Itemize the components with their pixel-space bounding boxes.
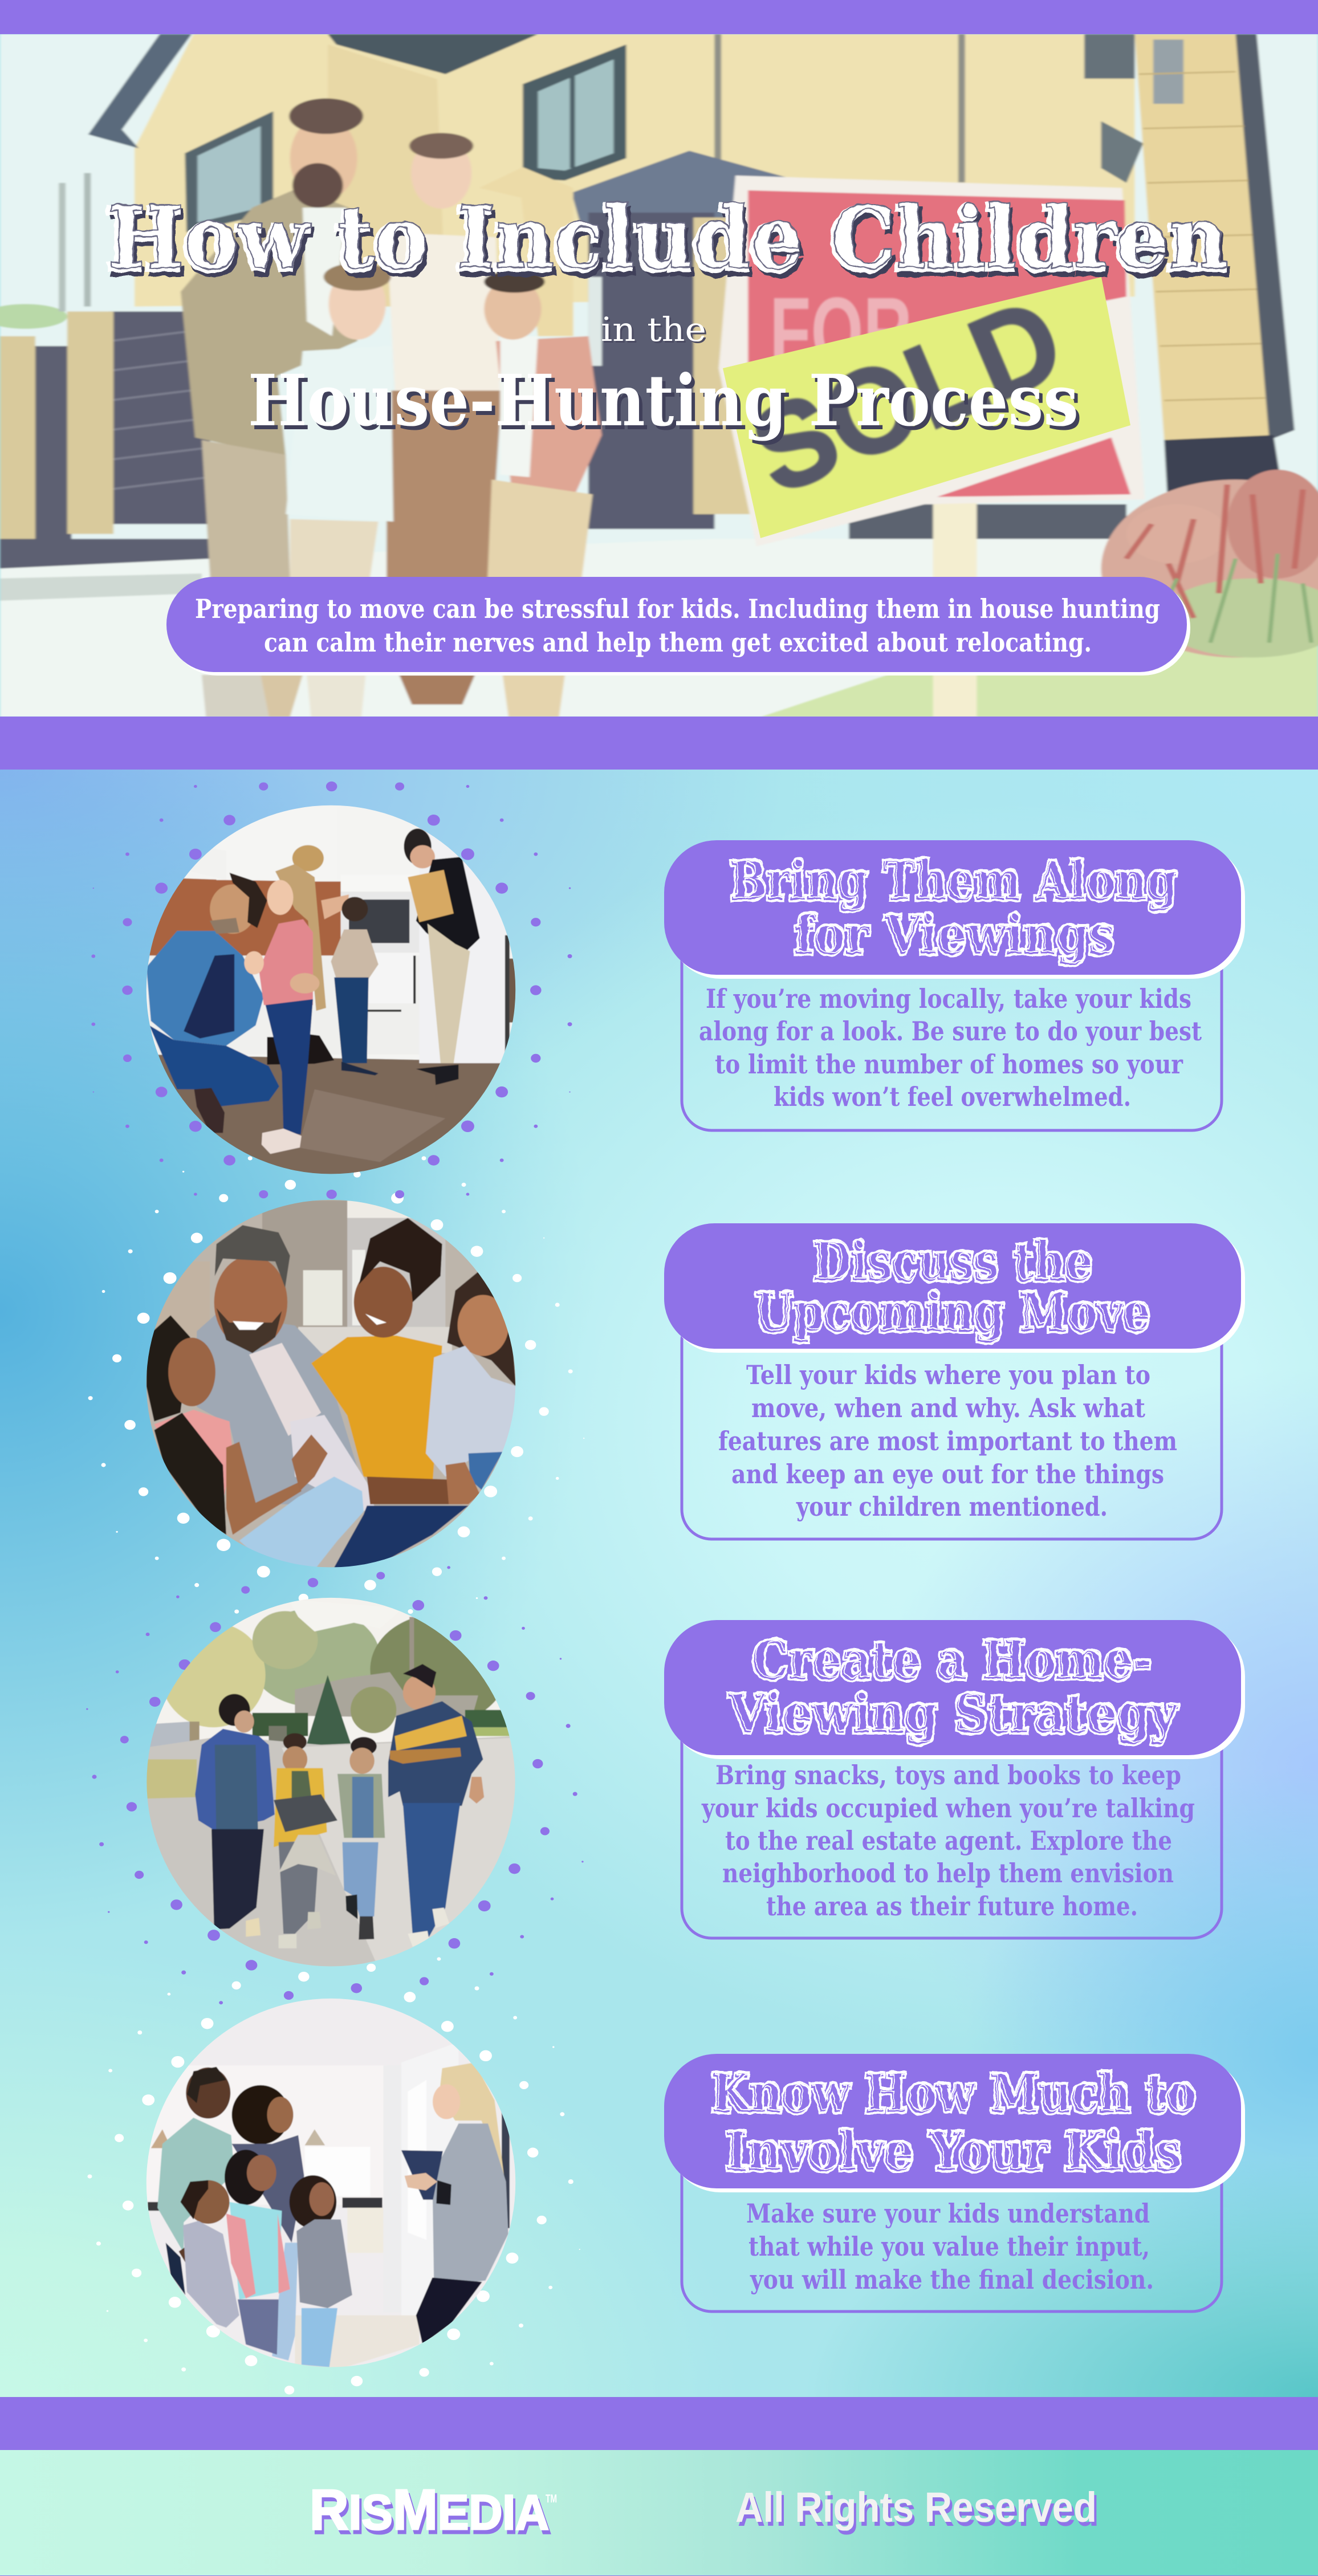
logo: RISMedia: RISMEDIA [310,2478,549,2542]
boy 2 [351,1737,377,1756]
heading pill: for Viewings [794,905,1114,966]
body box [682,1710,1222,1938]
car behind sign [849,504,1126,544]
body text: Make sure your kids understand [746,2198,1150,2229]
woman [232,2085,290,2144]
body text: features are most important to them [718,1426,1177,1456]
heading pill: Bring Them Along [731,848,1178,910]
heading pill [664,1223,1245,1353]
title line 1: How to Include Children [105,190,1226,290]
sold lettering: SOLD [734,271,1080,519]
top purple band [0,0,1318,34]
body text [746,2198,1154,2295]
heading pill [664,1620,1245,1759]
body text: and keep an eye out for the things [731,1459,1164,1490]
left fence [109,311,210,524]
dots ring: white, photo 2 [88,1156,584,1614]
intro callout pill [166,577,1190,675]
body text: Tell your kids where you plan to [746,1360,1150,1390]
logo: RISMedia: RISMEDIA [312,2482,551,2546]
footer band [0,2450,1318,2575]
body text: your kids occupied when you’re talking [701,1793,1195,1824]
woman behind [292,845,324,871]
girl [286,346,393,522]
man [403,1675,436,1710]
body text: move, when and why. Ask what [751,1393,1146,1423]
body text: along for a look. Be sure to do your best [699,1016,1202,1047]
man [197,1314,369,1504]
heading pill: Bring Them Along [730,850,1177,912]
heading pill [664,2054,1245,2192]
body text: to the real estate agent. Explore the [725,1825,1172,1856]
body text: the area as their future home. [766,1891,1138,1922]
panel: discuss the upcoming move [664,1223,1245,1539]
intro callout pill: Preparing to move can be stressful for kids. Including them in house hunting [195,593,1160,624]
heading pill: Create a Home- [752,1630,1152,1691]
heading pill: Viewing Strategy [728,1683,1178,1745]
agent [404,829,432,865]
body text: If you’re moving locally, take your kids [706,983,1191,1014]
bush [1101,479,1318,658]
heading pill: Know How Much to [711,2063,1195,2125]
body text: kids won’t feel overwhelmed. [774,1081,1131,1112]
windows [185,111,273,233]
porch roof [571,150,786,223]
woman [311,1336,442,1487]
heading pill: Upcoming Move [755,1282,1150,1344]
logo: RISMedia: TM [546,2493,557,2505]
for sale sign [719,176,1145,546]
title line 2: in the [603,312,708,351]
second purple band [0,717,1318,770]
title line 3: House-Hunting Process [251,364,1082,446]
girl [275,864,326,1011]
body text: your children mentioned. [796,1491,1108,1522]
girl right [447,1272,516,1386]
ground [0,539,1177,717]
title line 1: How to Include Children [108,194,1229,295]
panel: bring them along for viewings [664,840,1245,1130]
photo 2: family on the sofa [144,1198,518,1573]
garage [588,213,714,529]
gradient background [0,770,1318,2397]
girl [225,2150,267,2205]
woman [387,233,500,396]
body box [682,2143,1222,2312]
body text: neighborhood to help them envision [722,1858,1174,1889]
lower purple band [0,2397,1318,2450]
body text: to limit the number of homes so your [715,1049,1183,1080]
body text: you will make the final decision. [750,2264,1154,2295]
intro callout pill: can calm their nerves and help them get excited about relocating. [264,627,1092,658]
girl left [147,1315,190,1422]
title line 3: House-Hunting Process [248,360,1079,442]
heading pill: Involve Your Kids [727,2119,1183,2180]
panel: know how much to involve your kids [664,2054,1245,2312]
photo 3: family walking down the street [144,1594,518,1972]
photo 4: family talking with the agent [144,1996,518,2371]
body text [701,1760,1195,1922]
sign lettering: FOR [770,278,912,386]
footer copyright text: All Rights Reserved [735,2484,1097,2531]
title line 2: in the [601,310,706,349]
panel: create a home-viewing strategy [664,1620,1245,1938]
heading pill: for Viewings [796,902,1116,964]
man [147,931,264,1045]
body text: that while you value their input, [749,2231,1150,2262]
sign post [933,494,977,717]
brick pillar front [479,167,573,336]
dots ring: purple, photo 1 [91,782,572,1199]
body text [718,1360,1177,1522]
girl 2 [290,2175,336,2229]
heading pill: Create a Home- [754,1627,1153,1689]
body box [682,912,1222,1130]
heading pill: Viewing Strategy [730,1681,1179,1743]
dark jeans [334,1505,469,1573]
yellow sold sign [723,277,1130,538]
heading pill: Know How Much to [713,2061,1197,2122]
heading pill: Discuss the [813,1231,1092,1293]
body text [699,983,1202,1112]
body box [682,1311,1222,1539]
boy [187,2180,230,2224]
right pillar [1135,34,1269,440]
photo 1: family viewing a kitchen with an agent [144,804,518,1177]
man [181,188,357,457]
heading pill: Involve Your Kids [725,2121,1181,2183]
footer copyright text: All Rights Reserved [738,2488,1099,2535]
agent [439,2062,505,2179]
hero photo: family in front of sold house [0,34,1318,717]
boy [341,897,368,921]
man [186,2068,230,2119]
heading pill: Upcoming Move [756,1280,1152,1341]
boy [496,336,602,502]
boy 1 [283,1733,307,1751]
woman [219,1694,250,1726]
body text: Bring snacks, toys and books to keep [715,1760,1181,1790]
house wall [135,34,1135,307]
heading pill [664,840,1245,979]
dots ring: purple, photo 3 [86,1566,584,2004]
heading pill: Discuss the [815,1229,1094,1291]
dots ring: white, photo 4 [87,1957,580,2395]
title line 1: How to Include Children [107,188,1228,288]
